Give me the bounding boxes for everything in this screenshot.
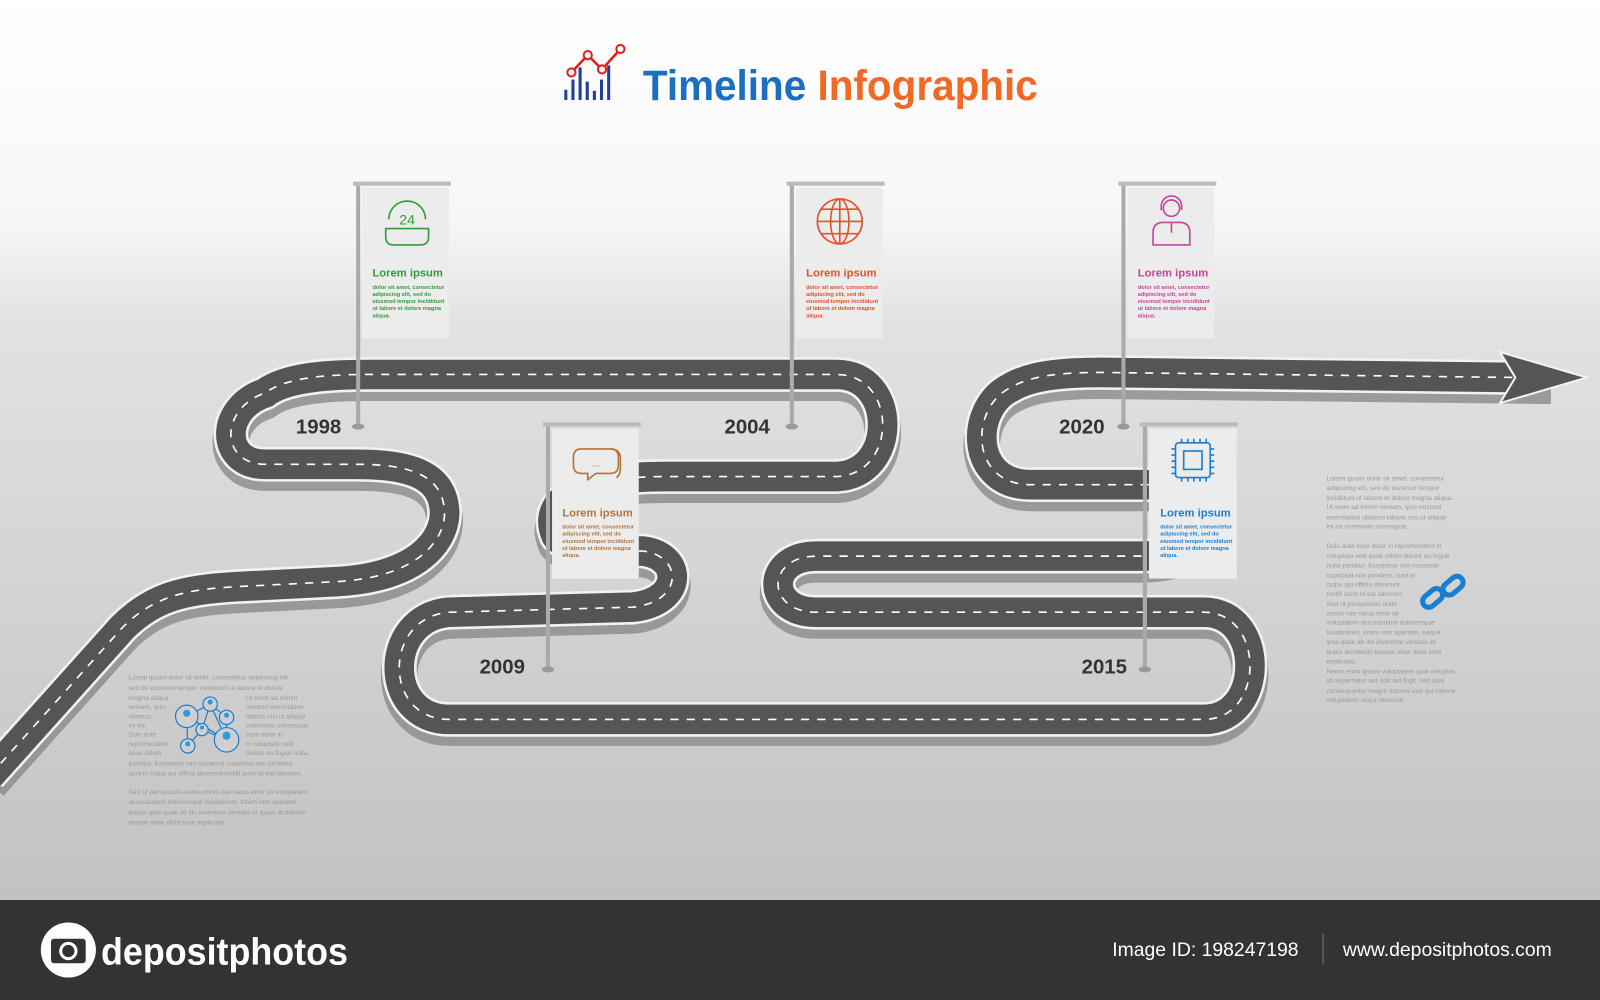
text block: right: consequuntur magni dolores eos qui ratione: [1327, 688, 1456, 695]
text block: right: Lorem ipsum dolor sit amet, consectetur: [1327, 476, 1445, 483]
flag 2020: adipiscing elit, sed do: [1138, 292, 1197, 298]
flag 1998: dolor sit amet, consectetur: [372, 285, 445, 291]
flag 2015: adipiscing elit, sed do: [1160, 532, 1219, 538]
text block: left: commodo consequat.: [246, 723, 309, 730]
flag 2009: ut labore et dolore magna: [562, 546, 632, 552]
text block: left: Lorem ipsum dolor sit amet, consectetur adipiscing elit,: [129, 675, 290, 682]
text block: right: Duis aute irure dolor in reprehenderit in: [1327, 543, 1442, 550]
road: [0, 352, 1587, 784]
text block: left: eaque ipsa quae ab illo inventore veritatis et quasi architecto: [129, 809, 306, 816]
logo: depositphotos: [101, 930, 348, 972]
text block: right: Ut enim ad minim veniam, quis nostrud: [1327, 504, 1441, 511]
flag 2004: dolor sit amet, consectetur: [806, 285, 879, 291]
text block: left: beatae vitae dicta sunt explicabo.: [129, 819, 227, 826]
flag 2020: ut labore et dolore magna: [1138, 306, 1207, 312]
text block: right: [1327, 476, 1456, 704]
text block: right: ipsa quae ab illo inventore veritatis et: [1327, 639, 1436, 646]
flag 2020: eiusmod tempor incididunt: [1138, 299, 1210, 305]
flag 2009: [542, 422, 641, 672]
text block: left: sed do eiusmod tempor incididunt ut labore et dolore: [129, 685, 283, 692]
text block: left: magna aliqua.: [129, 695, 170, 702]
flag 2020: Lorem ipsum: [1138, 268, 1208, 280]
flag 1998: eiusmod tempor incididunt: [372, 299, 445, 305]
logo: [41, 922, 348, 978]
text block: right: nulla pariatur. Excepteur sint occaecat: [1327, 562, 1439, 569]
text block: right: culpa qui officia deserunt: [1327, 582, 1400, 589]
flag 2004: aliqua.: [806, 313, 824, 319]
icon: 24h phone: [386, 201, 429, 245]
text block: right: Sed ut perspiciatis unde: [1327, 601, 1398, 608]
arrow head: [1500, 352, 1587, 403]
flag 2009: ...: [592, 458, 600, 469]
text block: left: dolore eu fugiat nulla: [246, 750, 308, 757]
text block: right: voluptate velit esse cillum dolore eu fugiat: [1327, 553, 1449, 560]
icon: support agent: [1153, 196, 1190, 245]
flag 2020: [1117, 182, 1216, 430]
flag 2009: aliqua.: [562, 553, 580, 559]
text block: right: Nemo enim ipsam voluptatem quia voluptas: [1327, 668, 1456, 675]
text block: left: [129, 675, 309, 826]
text block: right: laudantium, totam rem aperiam, eaque: [1327, 630, 1441, 637]
icon: globe: [817, 199, 862, 244]
text block: right: adipiscing elit, sed do eiusmod tempor: [1327, 485, 1440, 492]
flag 2004: eiusmod tempor incididunt: [806, 299, 878, 305]
text block: left: laboris nisi ut aliquip: [246, 713, 306, 720]
text block: left: veniam, quis: [129, 704, 166, 711]
text block: right: voluptatem accusantium doloremque: [1327, 619, 1435, 626]
text block: left: esse cillum: [129, 750, 162, 757]
text block: left: irure dolor in: [246, 732, 283, 739]
text block: right: sit aspernatur aut odit aut fugit, sed quia: [1327, 678, 1445, 685]
flag 2009: Lorem ipsum: [562, 507, 633, 519]
flag 2020: aliqua.: [1138, 313, 1156, 319]
flag 1998: aliqua.: [372, 313, 391, 319]
footer: www.depositphotos.com: [1342, 939, 1552, 961]
flag 2009: dolor sit amet, consectetur: [562, 525, 635, 531]
text block: left: sunt in culpa qui officia deserunt mollit anim id est laborum.: [129, 771, 302, 778]
text block: left: pariatur. Excepteur sint occaecat cupidatat non proident,: [129, 760, 294, 767]
flag 2004: adipiscing elit, sed do: [806, 292, 865, 298]
flag 1998: 24: [399, 212, 415, 228]
text block: left: Ut enim ad minim: [246, 695, 298, 702]
text block: right: omnis iste natus error sit: [1327, 610, 1399, 617]
flag 1998: [352, 182, 451, 430]
text block: right: explicabo.: [1327, 658, 1357, 665]
flag 2015: Lorem ipsum: [1160, 507, 1231, 519]
flag 1998: adipiscing elit, sed do: [372, 292, 432, 298]
flag 2015: eiusmod tempor incididunt: [1160, 539, 1232, 545]
text block: left: Sed ut perspiciatis unde omnis iste natus error sit voluptatem: [129, 789, 308, 796]
icon: chart: [564, 45, 624, 100]
title: Timeline Infographic: [643, 62, 1038, 110]
flag 2015: dolor sit amet, consectetur: [1160, 525, 1233, 531]
text block: right: quasi architecto beatae vitae dicta sunt: [1327, 649, 1441, 656]
footer: [0, 900, 1600, 1000]
flag 2009: adipiscing elit, sed do: [562, 532, 621, 538]
text block: left: ex ea: [129, 723, 145, 730]
icon: link: [1420, 574, 1466, 610]
flag 1998: ut labore et dolore magna: [372, 306, 442, 312]
text block: left: reprehenderit: [129, 741, 168, 748]
text block: right: incididunt ut labore et dolore magna aliqua.: [1327, 495, 1453, 502]
icon: chip: [1171, 439, 1214, 482]
flag 2015: aliqua.: [1160, 553, 1178, 559]
text block: right: exercitation ullamco laboris nisi ut aliquip: [1327, 514, 1447, 521]
text block: right: cupidatat non proident, sunt in: [1327, 573, 1416, 580]
flag 2004: ut labore et dolore magna: [806, 306, 876, 312]
icon: network: [176, 697, 239, 753]
year 2020: 2020: [1059, 417, 1105, 439]
text block: right: ex ea commodo consequat.: [1327, 524, 1408, 531]
text block: left: ullamco: [129, 713, 152, 720]
text block: left: nostrud exercitation: [246, 704, 304, 711]
text block: left: Duis aute: [129, 732, 157, 739]
text block: left: accusantium doloremque laudantium, totam rem aperiam,: [129, 799, 298, 806]
flag 2015: ut labore et dolore magna: [1160, 546, 1230, 552]
flag 2015: [1139, 422, 1238, 672]
year 2009: 2009: [480, 656, 525, 678]
year 2015: 2015: [1082, 656, 1127, 678]
flag 2004: Lorem ipsum: [806, 268, 877, 280]
footer: Image ID: 198247198: [1112, 939, 1299, 961]
flag 2004: [786, 182, 885, 430]
title: [564, 45, 1038, 110]
flag 1998: Lorem ipsum: [372, 268, 443, 280]
year 2004: 2004: [724, 417, 771, 439]
year 1998: 1998: [296, 417, 341, 439]
flag 2020: dolor sit amet, consectetur: [1138, 285, 1210, 291]
text block: right: voluptatem sequi nesciunt.: [1327, 697, 1405, 704]
icon: chat bubbles: [573, 449, 620, 480]
flag 2009: eiusmod tempor incididunt: [562, 539, 634, 545]
text block: left: in voluptate velit: [246, 741, 294, 748]
text block: right: mollit anim id est laborum.: [1327, 591, 1404, 598]
